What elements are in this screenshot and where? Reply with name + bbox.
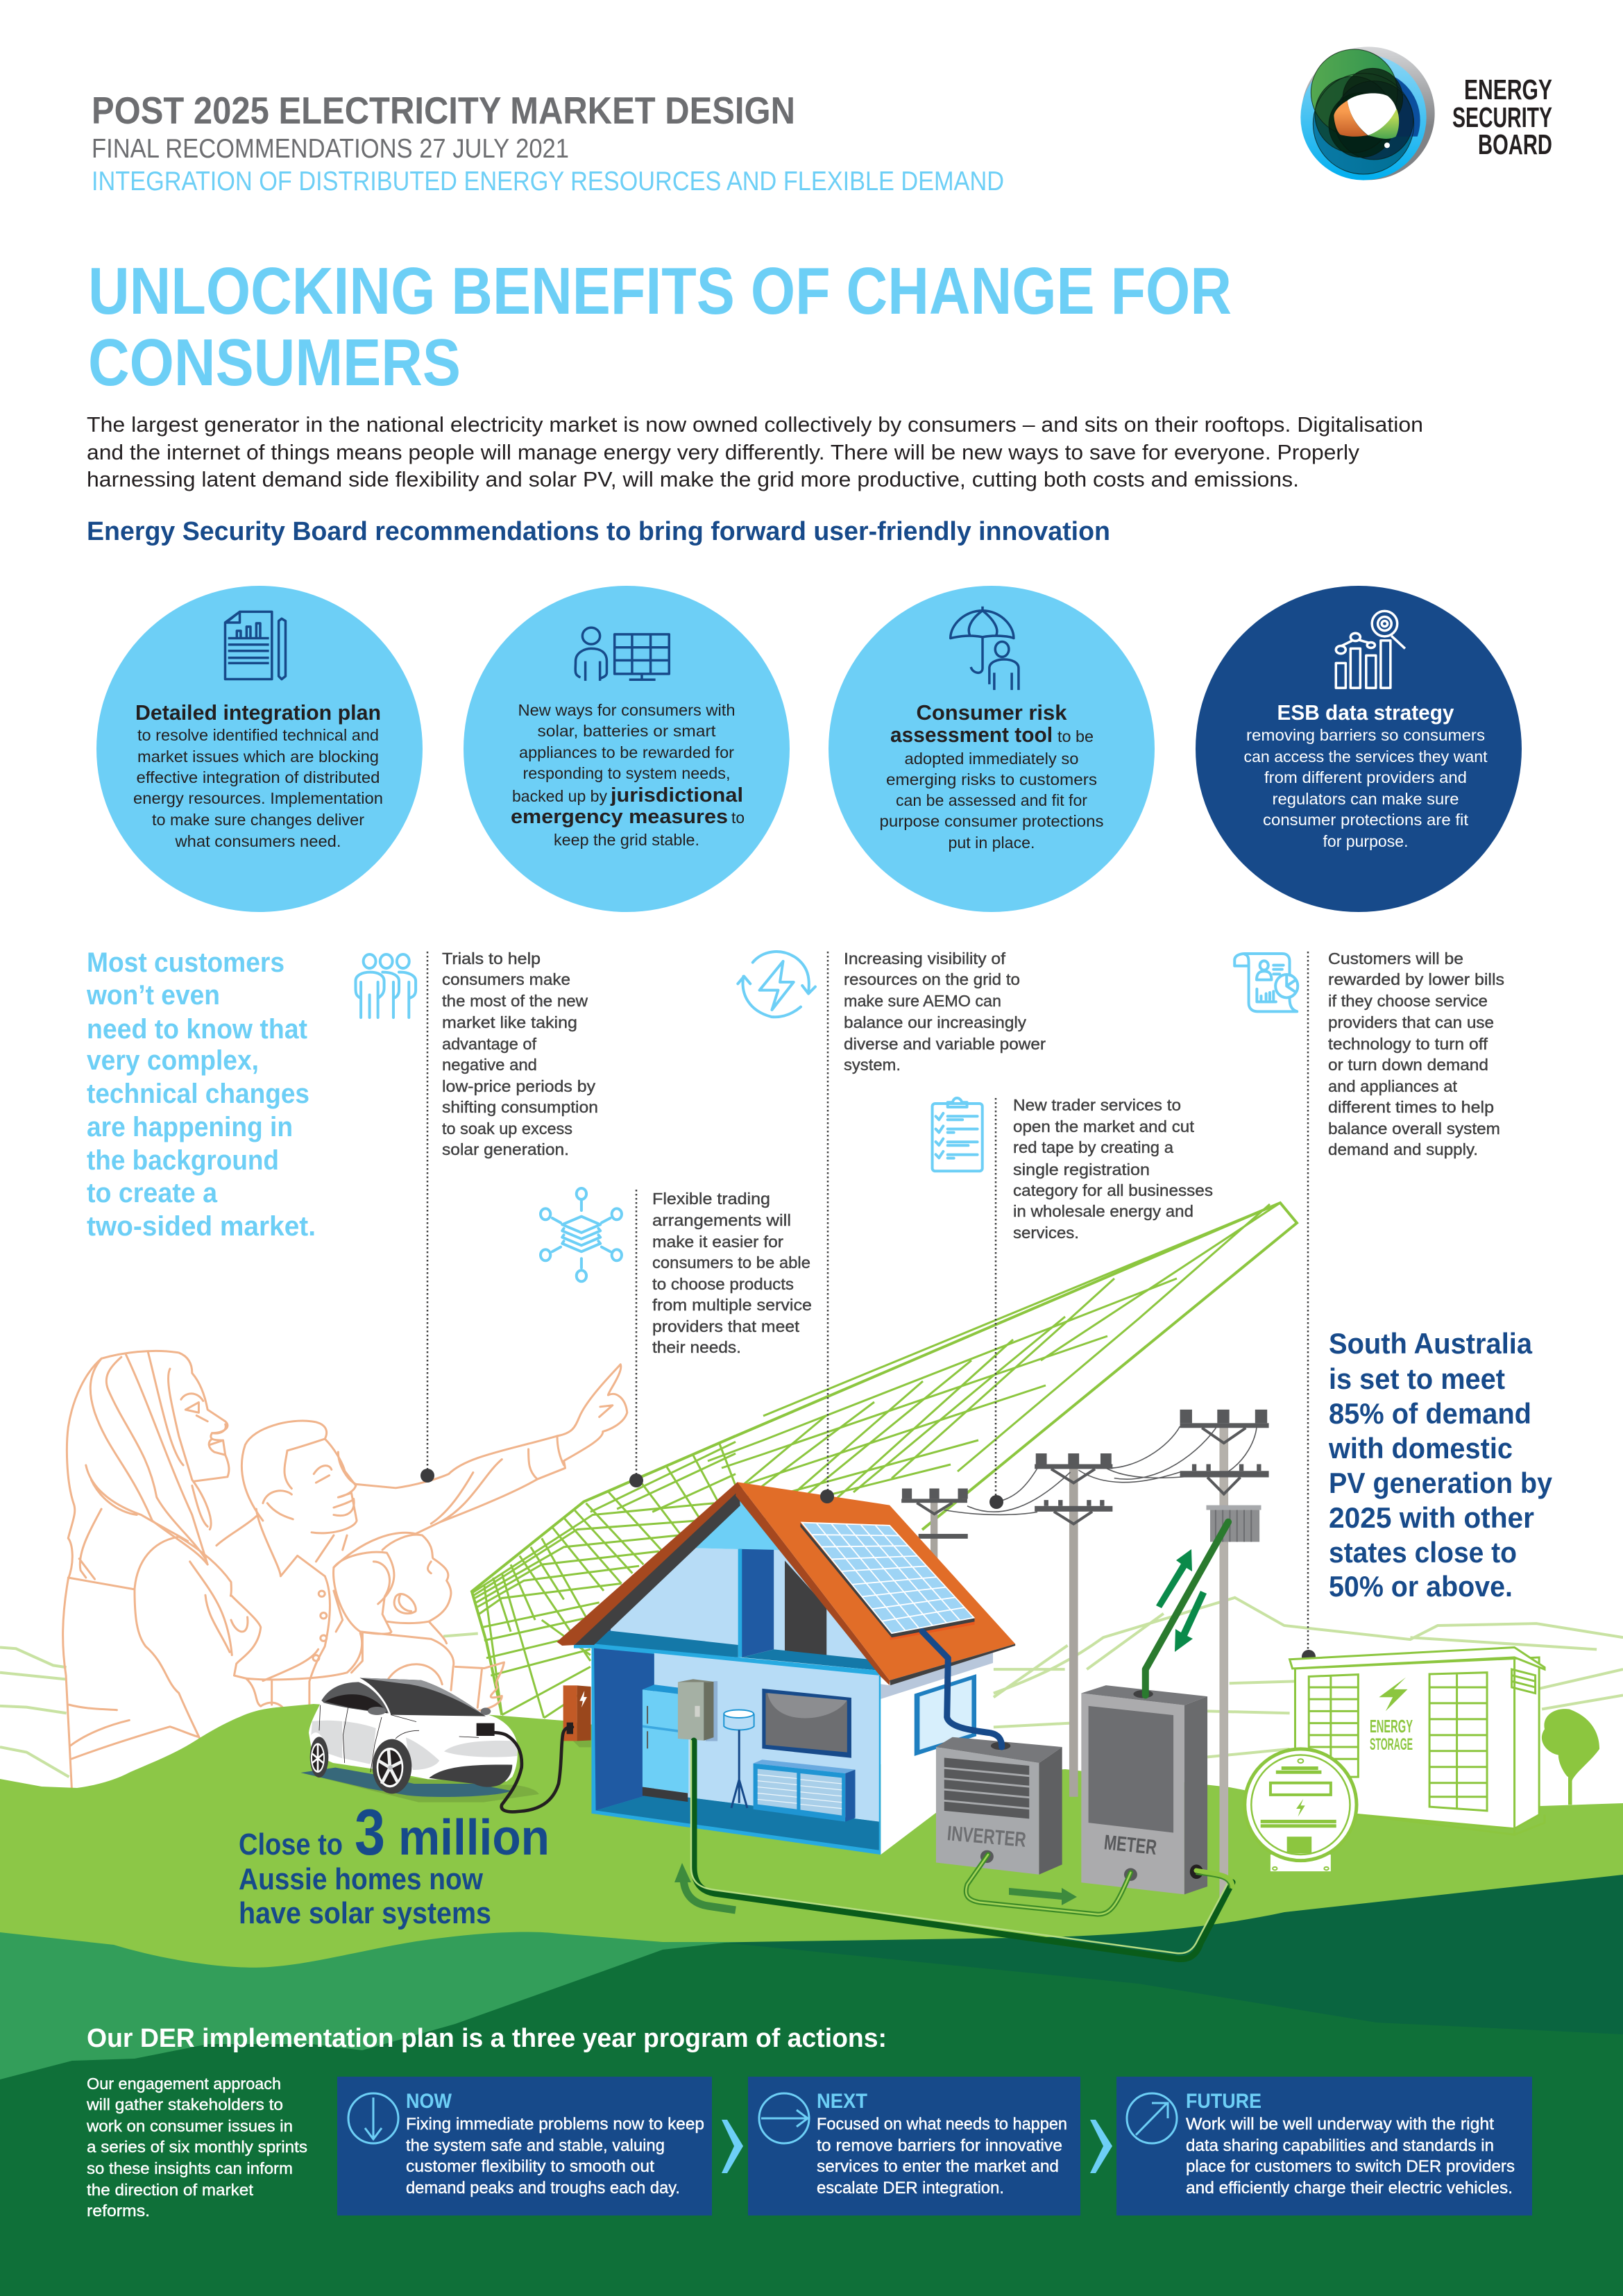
panel: detailed integration plan: effective integration of distributed — [136, 768, 380, 786]
panel: future: FUTURE — [1186, 2090, 1261, 2113]
panel: detailed integration plan: to resolve identified technical and — [137, 726, 379, 744]
panel: consumer risk assessment tool: purpose consumer protections — [880, 812, 1103, 830]
text: new trader services: red tape by creating a — [1013, 1138, 1173, 1156]
text: customers rewarded — [1328, 949, 1504, 1158]
text: flexible trading: to choose products — [652, 1275, 794, 1293]
panel: detailed integration plan: market issues which are blocking — [137, 748, 379, 766]
panel: ESB data strategy: for purpose. — [1323, 832, 1409, 850]
main title: CONSUMERS — [88, 326, 461, 400]
cable from meter to transformer — [1146, 1522, 1228, 1695]
icon: document with person and charts — [1234, 954, 1298, 1011]
child — [334, 1533, 504, 1711]
callout: South Australia: 85% of demand — [1329, 1397, 1531, 1430]
arrow: power up to grid — [1156, 1549, 1192, 1608]
panel: ESB data strategy: regulators can make sure — [1273, 790, 1459, 808]
section heading: implementation plan: Our DER implementation plan is a three year program of actions: — [87, 2024, 887, 2053]
panel: consumer risk assessment tool: put in place. — [948, 834, 1035, 852]
arrow: power down from grid — [1175, 1591, 1207, 1652]
panel: now: NOW — [406, 2090, 452, 2113]
panel: now: Fixing immediate problems now to keep — [406, 2115, 704, 2134]
callout: South Australia: 50% or above. — [1329, 1570, 1513, 1603]
panel: new ways for consumers: appliances to be rewarded for — [519, 743, 734, 761]
callout: most customers: need to know that — [87, 1014, 307, 1045]
text: customers rewarded: balance overall system — [1328, 1120, 1500, 1138]
text: new trader services: open the market and cut — [1013, 1117, 1195, 1136]
icon: bar chart with magnifier — [1336, 611, 1405, 688]
subheading: Energy Security Board recommendations to bring forward user-friendly innovation — [87, 517, 1110, 546]
green mesh fan of energy — [472, 1203, 1297, 1718]
text: customers rewarded: or turn down demand — [1328, 1056, 1488, 1074]
panel: detailed integration plan — [96, 586, 423, 912]
callout: most customers: to create a — [87, 1178, 218, 1208]
panel: detailed integration plan: energy resources. Implementation — [133, 789, 383, 807]
text: increasing visibility: system. — [844, 1056, 901, 1074]
panel: now: the system safe and stable, valuing — [406, 2136, 665, 2155]
panel: new ways for consumers: emergency measures — [511, 806, 728, 828]
intro paragraph: and the internet of things means people will manage energy very differently. There will be new ways to save for everyone. Properly — [87, 440, 1360, 464]
icon: checklist clipboard — [933, 1098, 983, 1171]
cable inverter to meter — [966, 1855, 1130, 1914]
icon: up-right arrow circle — [1127, 2093, 1177, 2143]
panel: ESB data strategy: from different providers and — [1264, 768, 1467, 786]
stat: 3 million homes: Close to — [239, 1827, 343, 1862]
panel: future: and efficiently charge their electric vehicles. — [1186, 2179, 1513, 2197]
callout: South Australia: is set to meet — [1329, 1362, 1505, 1395]
text: flexible trading: their needs. — [652, 1338, 741, 1356]
illustration: energy storage unit — [1290, 1648, 1599, 1834]
panel: detailed integration plan: what consumers need. — [174, 832, 341, 850]
callout: South Australia: South Australia — [1329, 1327, 1533, 1360]
text: increasing visibility: resources on the grid to — [844, 970, 1020, 988]
stat: 3 million homes — [239, 1796, 550, 1930]
text: increasing visibility: balance our increasingly — [844, 1013, 1027, 1031]
text: engagement approach — [86, 2075, 307, 2220]
header text block: FINAL RECOMMENDATIONS 27 JULY 2021 — [92, 134, 569, 164]
stat: 3 million homes: 3 — [355, 1796, 385, 1868]
callout: most customers: technical changes — [87, 1079, 309, 1109]
lower floor interior — [591, 1648, 881, 1855]
text: trials: the most of the new — [442, 992, 588, 1010]
callout: most customers: the background — [87, 1145, 279, 1176]
fridge — [643, 1685, 688, 1802]
arrow: curved flow to house — [683, 1874, 736, 1910]
panel: next: services to enter the market and — [817, 2157, 1059, 2176]
panel: now — [337, 2077, 712, 2215]
callout: South Australia — [1328, 1327, 1553, 1603]
television — [762, 1689, 851, 1758]
panel: ESB data strategy: consumer protections are fit — [1263, 811, 1469, 829]
woman — [63, 1351, 261, 1788]
panel: consumer risk assessment tool: assessment tool — [890, 723, 1053, 747]
panel: ESB data strategy: removing barriers so consumers — [1246, 726, 1485, 744]
panel: new ways for consumers: backed up by — [512, 787, 607, 805]
illustration: family looking up — [63, 1351, 627, 1788]
arrow: inverter to meter flow — [1009, 1888, 1077, 1905]
text: customers rewarded: demand and supply. — [1328, 1140, 1478, 1158]
panel: consumer risk assessment tool: adopted immediately so — [905, 750, 1078, 768]
text: new trader services: single registration — [1013, 1160, 1150, 1179]
panel: ESB data strategy: ESB data strategy — [1277, 700, 1454, 725]
text: new trader services: in wholesale energy and — [1013, 1202, 1193, 1220]
text: flexible trading: consumers to be able — [652, 1253, 810, 1272]
text: trials: low-price periods by — [442, 1077, 596, 1095]
icon: three people — [355, 954, 416, 1018]
text: trials: Trials to help — [442, 949, 541, 968]
illustration: smart meter dial — [1245, 1749, 1357, 1871]
text: increasing visibility: Increasing visibility of — [844, 949, 1006, 968]
callout: South Australia: 2025 with other — [1329, 1501, 1534, 1534]
text: customers rewarded: if they choose service — [1328, 992, 1488, 1010]
callout: most customers: very complex, — [87, 1045, 259, 1076]
panel: next — [748, 2077, 1080, 2215]
text: new trader services: New trader services to — [1013, 1096, 1181, 1114]
illustration: house — [556, 1482, 1015, 1855]
text: trials: advantage of — [442, 1035, 537, 1053]
header text block: INTEGRATION OF DISTRIBUTED ENERGY RESOURCES AND FLEXIBLE DEMAND — [92, 167, 1004, 196]
storage label — [1370, 1716, 1413, 1754]
underground green cable — [691, 1741, 1232, 1959]
icon: umbrella and person — [951, 607, 1019, 690]
text: flexible trading: Flexible trading — [652, 1190, 770, 1208]
roof — [556, 1482, 1015, 1685]
conduit from panel to inverter — [922, 1632, 1002, 1747]
logo: Energy Security Board: ENERGY — [1464, 74, 1552, 105]
panel: next: NEXT — [817, 2090, 867, 2113]
cabinet — [754, 1759, 856, 1822]
panel: future: data sharing capabilities and standards in — [1186, 2136, 1494, 2155]
icon: network of layers — [541, 1188, 622, 1281]
stat: 3 million homes: have solar systems — [239, 1896, 491, 1930]
intro paragraph: harnessing latent demand side flexibility and solar PV, will make the grid more productive, cutting both costs and emissions. — [87, 467, 1299, 491]
house side wall and window — [881, 1652, 993, 1855]
text: engagement approach: a series of six monthly sprints — [87, 2138, 307, 2156]
panel: detailed integration plan: to make sure changes deliver — [152, 811, 364, 829]
header text block — [92, 89, 1004, 196]
panel: new ways for consumers — [464, 586, 790, 912]
panel: detailed integration plan: Detailed integration plan — [135, 700, 381, 725]
illustration: electric car and charger — [300, 1678, 591, 1812]
panel: future: place for customers to switch DER providers — [1186, 2157, 1515, 2176]
chevron arrow — [1090, 2120, 1112, 2173]
panel: consumer risk assessment tool: can be assessed and fit for — [896, 791, 1087, 809]
text: increasing visibility — [844, 949, 1046, 1074]
panel: future: Work will be well underway with the right — [1186, 2115, 1494, 2134]
panel: consumer risk assessment tool — [829, 586, 1155, 912]
solar panel — [800, 1523, 974, 1640]
callout: most customers: two-sided market. — [87, 1211, 316, 1242]
panel: new ways for consumers: to — [731, 809, 745, 827]
header text block: POST 2025 ELECTRICITY MARKET DESIGN — [92, 89, 795, 132]
floor lamp — [724, 1710, 754, 1808]
text: trials: negative and — [442, 1056, 537, 1074]
panel: new ways for consumers: jurisdictional — [610, 784, 743, 807]
text: engagement approach: the direction of market — [87, 2181, 254, 2199]
text: flexible trading: arrangements will — [652, 1211, 791, 1229]
hills: mid green — [0, 1932, 763, 2117]
text: engagement approach: Our engagement approach — [87, 2075, 281, 2093]
storage label: ENERGY — [1370, 1716, 1413, 1737]
text: customers rewarded: Customers will be — [1328, 949, 1463, 968]
text: flexible trading — [652, 1190, 812, 1356]
panel: ESB data strategy: can access the services they want — [1243, 748, 1488, 766]
text: engagement approach: so these insights can inform — [87, 2159, 293, 2177]
main title — [88, 254, 1232, 400]
text: engagement approach: work on consumer issues in — [86, 2117, 293, 2135]
text: new trader services: services. — [1013, 1224, 1079, 1242]
icon: down arrow circle — [348, 2093, 398, 2143]
panel: next: escalate DER integration. — [817, 2179, 1004, 2197]
intro paragraph — [87, 412, 1423, 491]
text: customers rewarded: different times to help — [1328, 1098, 1494, 1116]
intro paragraph: The largest generator in the national electricity market is now owned collectively by consumers – and sits on their rooftops. Digitalisation — [87, 412, 1423, 437]
chevron arrow — [722, 2120, 743, 2173]
text: engagement approach: reforms. — [87, 2202, 150, 2220]
arrow head: flow to house — [674, 1863, 691, 1882]
text: flexible trading: providers that meet — [652, 1317, 800, 1335]
meter box — [1081, 1685, 1207, 1894]
callout: most customers — [86, 947, 316, 1242]
stat: 3 million homes: Aussie homes now — [239, 1862, 484, 1896]
logo: Energy Security Board — [1300, 47, 1552, 180]
panel: future — [1116, 2077, 1532, 2215]
text: trials: market like taking — [442, 1013, 577, 1031]
hills: deep green right — [694, 1875, 1623, 2082]
text: flexible trading: make it easier for — [652, 1233, 783, 1251]
text: customers rewarded: and appliances at — [1328, 1077, 1458, 1095]
panel: new ways for consumers: responding to system needs, — [523, 764, 730, 782]
text: customers rewarded: rewarded by lower bills — [1328, 970, 1504, 988]
text: increasing visibility: make sure AEMO can — [844, 992, 1001, 1010]
upper floor interior — [574, 1499, 879, 1675]
panel: new ways for consumers: keep the grid stable. — [554, 831, 699, 849]
switchboard box — [678, 1679, 717, 1741]
callout: South Australia: with domestic — [1328, 1432, 1513, 1464]
text: increasing visibility: diverse and variable power — [844, 1035, 1046, 1053]
panel: now: customer flexibility to smooth out — [406, 2157, 654, 2176]
illustration: inverter and meter — [922, 1522, 1228, 1914]
panel: consumer risk assessment tool: Consumer risk — [916, 700, 1067, 725]
panel: new ways for consumers: New ways for consumers with — [518, 701, 736, 719]
logo: Energy Security Board: BOARD — [1478, 128, 1552, 160]
panel: next: to remove barriers for innovative — [817, 2136, 1062, 2155]
text: trials: shifting consumption — [442, 1098, 598, 1116]
text: flexible trading: from multiple service — [652, 1296, 812, 1314]
inverter box — [936, 1737, 1062, 1875]
text: trials: solar generation. — [442, 1140, 569, 1158]
panel: new ways for consumers: solar, batteries or smart — [537, 722, 716, 740]
callout: most customers: Most customers — [87, 947, 284, 978]
icon: right arrow circle — [759, 2093, 809, 2143]
logo: Energy Security Board: SECURITY — [1452, 101, 1552, 133]
panel: ESB data strategy — [1196, 586, 1522, 912]
hills: dark green base — [0, 1943, 1623, 2296]
text: trials: to soak up excess — [442, 1120, 572, 1138]
panel: next: Focused on what needs to happen — [817, 2115, 1067, 2134]
text: trials — [442, 949, 598, 1158]
callout: South Australia: states close to — [1329, 1536, 1517, 1569]
man — [216, 1365, 627, 1707]
panel: now: demand peaks and troughs each day. — [406, 2179, 680, 2197]
storage label: STORAGE — [1370, 1735, 1413, 1754]
illustration: utility poles and wires — [901, 1410, 1269, 1898]
callout: most customers: are happening in — [87, 1112, 293, 1142]
distant hills outlines — [0, 1598, 1623, 1777]
hills: light green ground — [0, 1704, 1623, 2296]
icon: bolt with cycle arrows — [738, 952, 815, 1017]
text: customers rewarded: providers that can use — [1328, 1013, 1494, 1031]
callout: South Australia: PV generation by — [1329, 1467, 1553, 1499]
main title: UNLOCKING BENEFITS OF CHANGE FOR — [88, 254, 1232, 328]
panel: consumer risk assessment tool: to be — [1057, 727, 1094, 745]
text: trials: consumers make — [442, 970, 570, 988]
icon: person with solar panel — [575, 627, 669, 681]
call-out dotted leader lines and dots — [420, 952, 1316, 1664]
panel: consumer risk assessment tool: emerging risks to customers — [886, 770, 1097, 788]
text: new trader services — [1013, 1096, 1213, 1242]
stat: 3 million homes: million — [398, 1810, 550, 1866]
text: engagement approach: will gather stakeholders to — [86, 2095, 283, 2113]
icon: document with chart and pencil — [225, 611, 285, 679]
text: customers rewarded: technology to turn off — [1328, 1035, 1488, 1053]
label: meter: METER — [1103, 1831, 1158, 1859]
text: new trader services: category for all businesses — [1013, 1181, 1213, 1199]
callout: most customers: won’t even — [86, 980, 220, 1011]
label: inverter: INVERTER — [946, 1822, 1027, 1852]
